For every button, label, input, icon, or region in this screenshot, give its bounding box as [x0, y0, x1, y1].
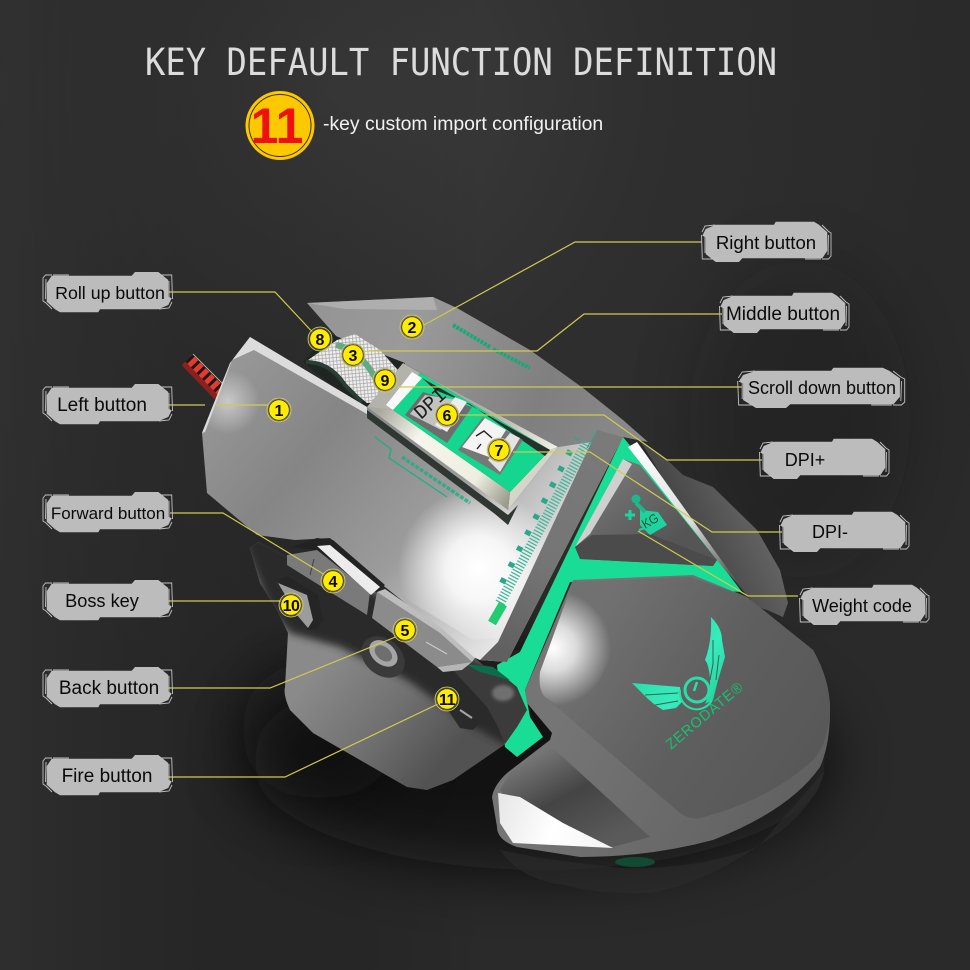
callout: Back button: Back button [59, 678, 159, 699]
palm dark facet [500, 747, 650, 847]
callout: Scroll down button [738, 368, 905, 408]
badge 2: 2 [408, 320, 417, 337]
left button body [202, 337, 623, 662]
scroll wheel [306, 334, 405, 403]
fire button [437, 683, 485, 730]
weight button triangle [575, 459, 717, 566]
badge 7: 7 [495, 443, 504, 460]
callout: Boss key: Boss key [65, 591, 140, 611]
callout: Fire button: Fire button [62, 766, 152, 787]
palm chrome [498, 793, 613, 848]
right side grip [640, 440, 788, 617]
ruler scale [492, 431, 597, 623]
badge 11 [435, 687, 459, 711]
top button print [453, 325, 530, 368]
callout: Left button: Left button [57, 395, 147, 416]
callout: Weight code: Weight code [812, 596, 912, 616]
triangle lower lip [575, 534, 717, 566]
callout: Fire button [43, 755, 172, 795]
badge: 11 keys: 11 [251, 98, 303, 154]
callout: Middle button: Middle button [726, 304, 840, 325]
callout: DPI-: DPI- [812, 522, 848, 542]
icon: weight KG: KG [639, 510, 661, 532]
dark thumb arm [453, 663, 527, 744]
badge 3 [341, 343, 365, 367]
icon: weight KG [625, 494, 667, 535]
logo: wings [632, 617, 725, 710]
leader lines [168, 242, 798, 777]
body print [375, 437, 470, 503]
forward button [287, 538, 385, 615]
badge 4 [321, 569, 345, 593]
key bay inner [393, 373, 550, 492]
callout: Boss key [43, 580, 172, 620]
white strip [386, 372, 422, 410]
badge 1 [267, 398, 291, 422]
boss key [278, 576, 323, 630]
badge 5 [393, 618, 417, 642]
callout: DPI+: DPI+ [785, 450, 825, 470]
badge 8: 8 [316, 332, 325, 349]
badge 10 [279, 593, 303, 617]
palm rest [492, 575, 830, 857]
callout: Scroll down button: Scroll down button [748, 378, 896, 398]
badge 11: 11 [439, 692, 456, 709]
badge 2 [400, 315, 424, 339]
logo: brand name: ZERODATE® [663, 679, 747, 753]
badge 10: 10 [283, 598, 300, 615]
callout: Roll up button: Roll up button [55, 283, 165, 303]
body right bevel [480, 430, 623, 662]
palm top face [540, 577, 830, 818]
key: DPI [405, 384, 472, 443]
badge 8 [308, 327, 332, 351]
callout: Right button: Right button [716, 232, 816, 253]
mouse illustration [187, 297, 830, 893]
thumb plate dark band [250, 542, 505, 746]
subtitle: -key custom import configuration [323, 113, 603, 135]
badge 4: 4 [329, 574, 338, 591]
badge 7 [487, 438, 511, 462]
top button highlight [307, 297, 437, 310]
callout: Middle button [720, 293, 849, 333]
callout: Back button [43, 667, 172, 707]
badge 6: 6 [443, 408, 452, 425]
badge 5: 5 [401, 623, 410, 640]
wheel bay [303, 333, 405, 410]
badge 9 [373, 368, 397, 392]
bay dark top edge [422, 378, 550, 456]
palm highlight [540, 580, 640, 715]
body highlights [202, 337, 586, 640]
callout: Forward button [43, 492, 172, 532]
key: shoot [458, 417, 523, 475]
callout: DPI+ [760, 439, 889, 479]
callout: Roll up button [43, 272, 172, 312]
frame shadow [367, 410, 518, 525]
top right button [307, 297, 648, 447]
sniper knob [353, 628, 413, 686]
badge 1: 1 [275, 403, 284, 420]
callout: Weight code [800, 585, 929, 625]
floor reflection [500, 770, 825, 893]
green light channels [497, 437, 742, 757]
cable [187, 354, 226, 394]
chrome strip right [628, 442, 737, 582]
key: DPI: DPI [410, 384, 452, 425]
thumb plate [250, 542, 517, 790]
badge 9: 9 [381, 373, 390, 390]
title: KEY DEFAULT FUNCTION DEFINITION [145, 41, 777, 84]
callout: DPI- [780, 512, 909, 552]
back button [372, 589, 475, 672]
left edge chrome [202, 337, 367, 433]
callout: Right button [702, 222, 831, 262]
number badges [267, 315, 511, 711]
key bay frame [367, 363, 558, 510]
triangle bright edge [575, 459, 632, 547]
callout: Left button [43, 384, 172, 424]
callout: Forward button: Forward button [51, 504, 165, 523]
badge: 11 keys [246, 91, 314, 160]
badge 6 [435, 403, 459, 427]
badge 3: 3 [349, 348, 358, 365]
